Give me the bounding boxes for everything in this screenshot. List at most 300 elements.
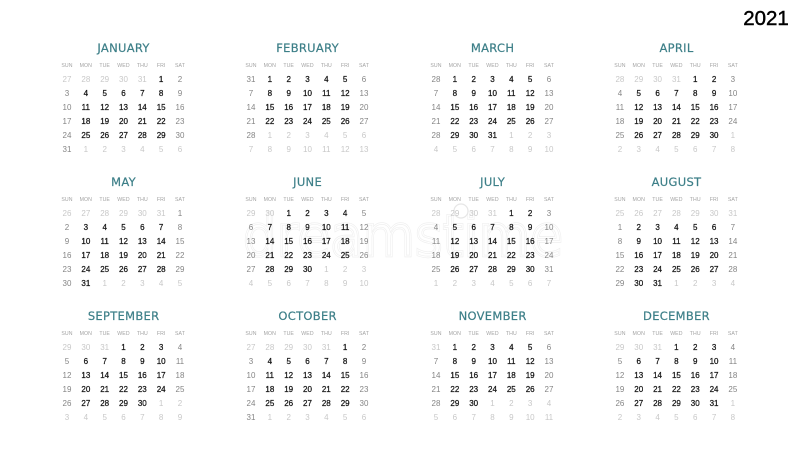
date grid: February: 9	[286, 89, 291, 98]
date grid: October: 30	[360, 399, 368, 408]
date grid: April: 20	[653, 117, 662, 126]
date grid: August: 21	[728, 251, 737, 260]
date grid: October: 11	[266, 371, 274, 380]
date grid: October: 10	[247, 371, 255, 380]
date grid: September: 30	[138, 399, 147, 408]
date grid: June: TUE	[283, 197, 294, 203]
month title: April: APRIL	[659, 41, 694, 55]
date grid: March: 23	[469, 117, 478, 126]
date grid: June: 22	[284, 251, 293, 260]
date grid: January: 22	[157, 117, 166, 126]
date grid: September: MON	[80, 331, 92, 337]
date grid: January: 29	[157, 131, 166, 140]
date grid: November: 9	[509, 413, 514, 422]
date grid: April: 30	[653, 75, 662, 84]
date grid: August: 9	[637, 237, 641, 246]
date grid: July: 5	[453, 223, 457, 232]
date grid: March: 12	[526, 89, 535, 98]
date grid: August: 12	[691, 237, 700, 246]
date grid: July: MON	[449, 197, 461, 203]
date grid: November: 3	[528, 399, 532, 408]
date grid: May: 11	[100, 237, 109, 246]
date grid: December: 1	[674, 343, 679, 352]
date grid: July: 23	[526, 251, 535, 260]
date grid: January: 28	[81, 75, 90, 84]
date grid: December: 13	[634, 371, 643, 380]
date grid: November: 29	[450, 399, 459, 408]
date grid: July: 18	[432, 251, 440, 260]
month: June	[245, 175, 369, 288]
date grid: June: 5	[268, 279, 272, 288]
date grid: October: 9	[362, 357, 366, 366]
date grid: February: TUE	[283, 63, 294, 69]
date grid: December: 6	[693, 413, 697, 422]
date grid: August: 27	[710, 265, 718, 274]
date grid: May: 22	[176, 251, 184, 260]
date grid: April: 28	[672, 131, 681, 140]
date grid: January: 17	[63, 117, 71, 126]
date grid: March: 28	[432, 75, 440, 84]
date grid: May: 30	[138, 209, 147, 218]
date grid: November: 9	[471, 357, 476, 366]
date grid: June: 13	[247, 237, 255, 246]
date grid: January: 5	[159, 145, 163, 154]
date grid: March: 15	[450, 103, 459, 112]
date grid: September: 24	[157, 385, 166, 394]
date grid: January: 6	[178, 145, 182, 154]
date grid: December: 28	[653, 399, 662, 408]
date grid: November: 8	[490, 413, 495, 422]
date grid: January: 8	[159, 89, 163, 98]
date grid: May: SAT	[175, 197, 185, 203]
date grid: July: 29	[507, 265, 516, 274]
date grid: January: THU	[137, 63, 148, 69]
date grid: September: 12	[63, 371, 71, 380]
date grid: March: TUE	[468, 63, 479, 69]
date grid: August: 3	[655, 223, 660, 232]
date grid: September: 3	[65, 413, 69, 422]
date grid: August: 5	[693, 223, 697, 232]
month: May	[61, 175, 185, 288]
date grid: December: SUN	[614, 331, 626, 337]
date grid: September: 19	[63, 385, 71, 394]
date grid: November: SAT	[544, 331, 554, 337]
date grid: October: 5	[286, 357, 291, 366]
date grid: September: 10	[157, 357, 166, 366]
date grid: September: 5	[102, 413, 107, 422]
date grid: March: 29	[450, 131, 459, 140]
date grid: December: 30	[634, 343, 643, 352]
date grid: June: SAT	[359, 197, 369, 203]
date grid: May: 5	[121, 223, 126, 232]
date grid: May: 24	[81, 265, 90, 274]
date grid: December: 31	[653, 343, 662, 352]
date grid: June: 29	[284, 265, 293, 274]
date grid: July: 7	[547, 279, 551, 288]
date grid: November: 2	[471, 343, 476, 352]
date grid: March: 3	[547, 131, 551, 140]
date grid: July: 21	[488, 251, 497, 260]
month title: January: JANUARY	[97, 41, 150, 55]
date grid: February: 17	[303, 103, 312, 112]
date grid: January: 1	[159, 75, 163, 84]
date grid: June: 24	[322, 251, 331, 260]
date grid: February: 1	[268, 131, 272, 140]
date grid: April: 11	[616, 103, 624, 112]
date grid: December: 8	[731, 413, 735, 422]
date grid: December: MON	[633, 331, 645, 337]
date grid: May: 31	[81, 279, 90, 288]
date grid: November: 5	[434, 413, 438, 422]
date grid: May: SUN	[61, 197, 73, 203]
date grid: December: 3	[637, 413, 641, 422]
date grid: June: 2	[343, 265, 347, 274]
date grid: November: THU	[506, 331, 517, 337]
date grid: November: 11	[545, 413, 553, 422]
date grid: April: THU	[690, 63, 701, 69]
date grid: July: 13	[469, 237, 478, 246]
date grid: October: 18	[265, 385, 274, 394]
date grid: February: 3	[305, 131, 310, 140]
date grid: April: 7	[712, 145, 716, 154]
date grid: November: 10	[488, 357, 497, 366]
date grid: March: 13	[545, 89, 553, 98]
date grid: February: SUN	[245, 63, 257, 69]
date grid: February: 4	[324, 131, 329, 140]
date grid: July: FRI	[526, 197, 534, 203]
date grid: April: 3	[731, 75, 735, 84]
date grid: September: 9	[140, 357, 145, 366]
date grid: January: 31	[138, 75, 147, 84]
date grid: August: 23	[634, 265, 643, 274]
date grid: December: 27	[634, 399, 643, 408]
date grid: October: TUE	[283, 331, 294, 337]
date grid: December: 3	[712, 343, 716, 352]
date grid: November: 19	[526, 371, 535, 380]
date grid: June: 1	[286, 209, 291, 218]
date grid: March: 28	[432, 131, 440, 140]
date grid: December: 24	[710, 385, 718, 394]
date grid: July: 28	[488, 265, 497, 274]
date grid: August: 2	[637, 223, 641, 232]
date grid: February: 28	[247, 131, 255, 140]
date grid: March: 8	[453, 89, 457, 98]
date grid: August: MON	[633, 197, 645, 203]
date grid: May: 27	[81, 209, 90, 218]
date grid: February: 5	[343, 75, 347, 84]
date grid: March: 2	[471, 75, 476, 84]
date grid: March: 9	[528, 145, 532, 154]
date grid: October: 26	[284, 399, 293, 408]
date grid: October: 2	[286, 413, 291, 422]
date grid: July: 3	[471, 279, 476, 288]
date grid: December: 8	[674, 357, 679, 366]
date grid: March: 10	[545, 145, 553, 154]
date grid: May: 12	[119, 237, 128, 246]
date grid: August: 22	[615, 265, 624, 274]
date grid: December: 19	[615, 385, 624, 394]
month: February	[245, 41, 369, 154]
date grid: November	[430, 331, 554, 422]
date grid: December: 7	[712, 413, 716, 422]
date grid: April: 29	[691, 131, 700, 140]
date grid: April: 28	[615, 75, 624, 84]
date grid: May: 29	[119, 209, 128, 218]
date grid: December: 23	[691, 385, 700, 394]
date grid: August: 2	[693, 279, 697, 288]
date grid: March: 9	[471, 89, 476, 98]
date grid: September: 1	[121, 343, 126, 352]
date grid: September: 18	[176, 371, 184, 380]
date grid: November: 17	[488, 371, 497, 380]
date grid: May: 26	[119, 265, 128, 274]
date grid: December: 25	[728, 385, 737, 394]
date grid: November: 8	[453, 357, 457, 366]
date grid: October: 5	[343, 413, 347, 422]
date grid: December: 6	[637, 357, 641, 366]
date grid: July: 24	[545, 251, 553, 260]
month title: December: DECEMBER	[643, 309, 710, 323]
date grid: May: MON	[80, 197, 92, 203]
date grid: February: 11	[322, 89, 330, 98]
date grid: October: 31	[322, 343, 331, 352]
date grid: September: 29	[119, 399, 128, 408]
date grid: March: SAT	[544, 63, 554, 69]
date grid: April: 24	[728, 117, 737, 126]
month: December	[614, 309, 738, 422]
date grid: March: 6	[547, 75, 551, 84]
date grid: February: 15	[265, 103, 274, 112]
date grid: November: 7	[434, 357, 438, 366]
date grid: October: 16	[360, 371, 368, 380]
date grid: August	[614, 197, 738, 288]
date grid: July: 14	[488, 237, 497, 246]
date grid: March: 8	[509, 145, 514, 154]
date grid: April: 25	[615, 131, 624, 140]
date grid: December: 18	[728, 371, 737, 380]
date grid: July: 12	[450, 237, 459, 246]
date grid: April: 21	[672, 117, 681, 126]
date grid: April: 1	[731, 131, 735, 140]
date grid: June: 10	[322, 223, 331, 232]
date grid: July: 31	[488, 209, 497, 218]
date grid: May: 26	[63, 209, 71, 218]
date grid: June: 20	[247, 251, 255, 260]
date grid: March: 4	[509, 75, 514, 84]
date grid: November: 12	[526, 357, 535, 366]
date grid: April: 6	[655, 89, 660, 98]
date grid: April: 5	[637, 89, 641, 98]
date grid: August: 28	[672, 209, 681, 218]
date grid: January: 10	[63, 103, 71, 112]
date grid: December: 22	[672, 385, 681, 394]
date grid: June: 7	[268, 223, 272, 232]
date grid: March: 1	[509, 131, 514, 140]
date grid: November: 23	[469, 385, 478, 394]
date grid: September: 9	[178, 413, 182, 422]
date grid: January: 30	[119, 75, 128, 84]
date grid: October: 15	[341, 371, 350, 380]
date grid: June: 4	[249, 279, 253, 288]
date grid: June: 25	[341, 251, 350, 260]
date grid: May: 18	[100, 251, 109, 260]
date grid: February: 7	[249, 89, 253, 98]
date grid: January: 3	[121, 145, 126, 154]
date grid: May: 25	[100, 265, 109, 274]
date grid: December: 29	[615, 343, 624, 352]
date grid: May: 20	[138, 251, 147, 260]
date grid: June: THU	[321, 197, 332, 203]
date grid: March: 25	[507, 117, 516, 126]
date grid: February: THU	[321, 63, 332, 69]
date grid: January: 24	[63, 131, 71, 140]
date grid: May: 17	[81, 251, 90, 260]
date grid: September: 16	[138, 371, 147, 380]
date grid: July: 25	[432, 265, 440, 274]
month title: March: MARCH	[471, 41, 514, 55]
date grid: April: 2	[618, 145, 622, 154]
date grid: May: THU	[137, 197, 148, 203]
date grid: September: 2	[140, 343, 145, 352]
date grid: October: 30	[303, 343, 312, 352]
month title: September: SEPTEMBER	[88, 309, 159, 323]
date grid: May: TUE	[99, 197, 110, 203]
date grid: December: 5	[674, 413, 679, 422]
date grid: September: 2	[178, 399, 182, 408]
date grid: October: 17	[247, 385, 255, 394]
date grid: June: 16	[303, 237, 312, 246]
date grid: February: 6	[362, 75, 366, 84]
date grid: April: 29	[634, 75, 643, 84]
date grid: December: 2	[618, 413, 622, 422]
date grid: June: 5	[362, 209, 366, 218]
date grid: January: 2	[178, 75, 182, 84]
date grid: April: 19	[634, 117, 643, 126]
date grid: September: 23	[138, 385, 147, 394]
date grid: August: 11	[672, 237, 681, 246]
date grid: May: 1	[102, 279, 107, 288]
date grid: August: SUN	[614, 197, 626, 203]
date grid: January: 19	[100, 117, 109, 126]
date grid: March: 7	[434, 89, 438, 98]
date grid: July: 6	[471, 223, 476, 232]
date grid: August: 10	[653, 237, 662, 246]
date grid: August: 28	[728, 265, 737, 274]
date grid: May: 13	[138, 237, 147, 246]
date grid: November: 11	[507, 357, 515, 366]
date grid: June: 19	[360, 237, 368, 246]
date grid: September: SUN	[61, 331, 73, 337]
date grid: January: SUN	[61, 63, 73, 69]
month: January	[61, 41, 185, 154]
date grid: February: 4	[324, 75, 329, 84]
date grid: September: 13	[81, 371, 90, 380]
date grid: April: 8	[731, 145, 735, 154]
date grid: November: 13	[545, 357, 553, 366]
month title: February: FEBRUARY	[276, 41, 339, 55]
date grid: September: WED	[117, 331, 130, 337]
date grid: January: 30	[176, 131, 184, 140]
date grid: May: 6	[140, 223, 145, 232]
date grid: November: 10	[526, 413, 535, 422]
date grid: August: TUE	[652, 197, 663, 203]
date grid: March: 26	[526, 117, 535, 126]
date grid: January: 14	[138, 103, 147, 112]
date grid: March: 21	[432, 117, 440, 126]
date grid: November: FRI	[526, 331, 534, 337]
date grid: November: MON	[449, 331, 461, 337]
date grid: August: 16	[634, 251, 643, 260]
date grid: July: SAT	[544, 197, 554, 203]
date grid: June: 8	[286, 223, 291, 232]
date grid: November: 1	[453, 343, 457, 352]
date grid: February: 11	[322, 145, 330, 154]
date grid: August: 3	[712, 279, 716, 288]
date grid: July: 16	[526, 237, 535, 246]
date grid: March: 11	[507, 89, 515, 98]
date grid: January: 20	[119, 117, 128, 126]
date grid: December: WED	[670, 331, 683, 337]
date grid: April: 30	[710, 131, 718, 140]
date grid: September: 28	[100, 399, 109, 408]
date grid: July: 11	[432, 237, 440, 246]
date grid: January: 1	[84, 145, 88, 154]
date grid: September: 4	[84, 413, 88, 422]
date grid: November: 6	[453, 413, 457, 422]
date grid: October: 22	[341, 385, 350, 394]
date grid: August: 15	[615, 251, 624, 260]
date grid: February: 13	[360, 89, 368, 98]
date grid: June: 4	[343, 209, 347, 218]
date grid: November: 25	[507, 385, 516, 394]
date grid: January: SAT	[175, 63, 185, 69]
date grid: October: 25	[265, 399, 274, 408]
date grid: December: 10	[710, 357, 718, 366]
date grid: February: 1	[268, 75, 272, 84]
date grid: September: 4	[178, 343, 182, 352]
date grid: May: 19	[119, 251, 128, 260]
date grid: August: SAT	[728, 197, 738, 203]
date grid: January	[61, 63, 185, 154]
month title: June: JUNE	[293, 175, 322, 189]
date grid: August: FRI	[710, 197, 718, 203]
date grid: June: 17	[322, 237, 331, 246]
date grid: June	[245, 197, 369, 288]
date grid: April: 27	[653, 131, 662, 140]
date grid: September: 30	[81, 343, 90, 352]
date grid: October: 2	[362, 343, 366, 352]
date grid: October: 7	[324, 357, 329, 366]
date grid: February: 22	[265, 117, 274, 126]
date grid: September: 31	[100, 343, 109, 352]
date grid: May: 3	[84, 223, 88, 232]
date grid: November: 20	[545, 371, 553, 380]
month title: May: MAY	[111, 175, 136, 189]
date grid: December: 1	[731, 399, 735, 408]
date grid: October: 31	[247, 413, 255, 422]
date grid: March: 2	[528, 131, 532, 140]
date grid: September: FRI	[157, 331, 165, 337]
date grid: June: MON	[264, 197, 276, 203]
date grid: August: 25	[615, 209, 624, 218]
date grid: July: 8	[509, 223, 514, 232]
date grid: April: 15	[691, 103, 700, 112]
date grid: June: 23	[303, 251, 312, 260]
date grid: February: 2	[286, 75, 291, 84]
date grid: April: 22	[691, 117, 700, 126]
date grid: December: 9	[693, 357, 697, 366]
date grid: April: 9	[712, 89, 716, 98]
